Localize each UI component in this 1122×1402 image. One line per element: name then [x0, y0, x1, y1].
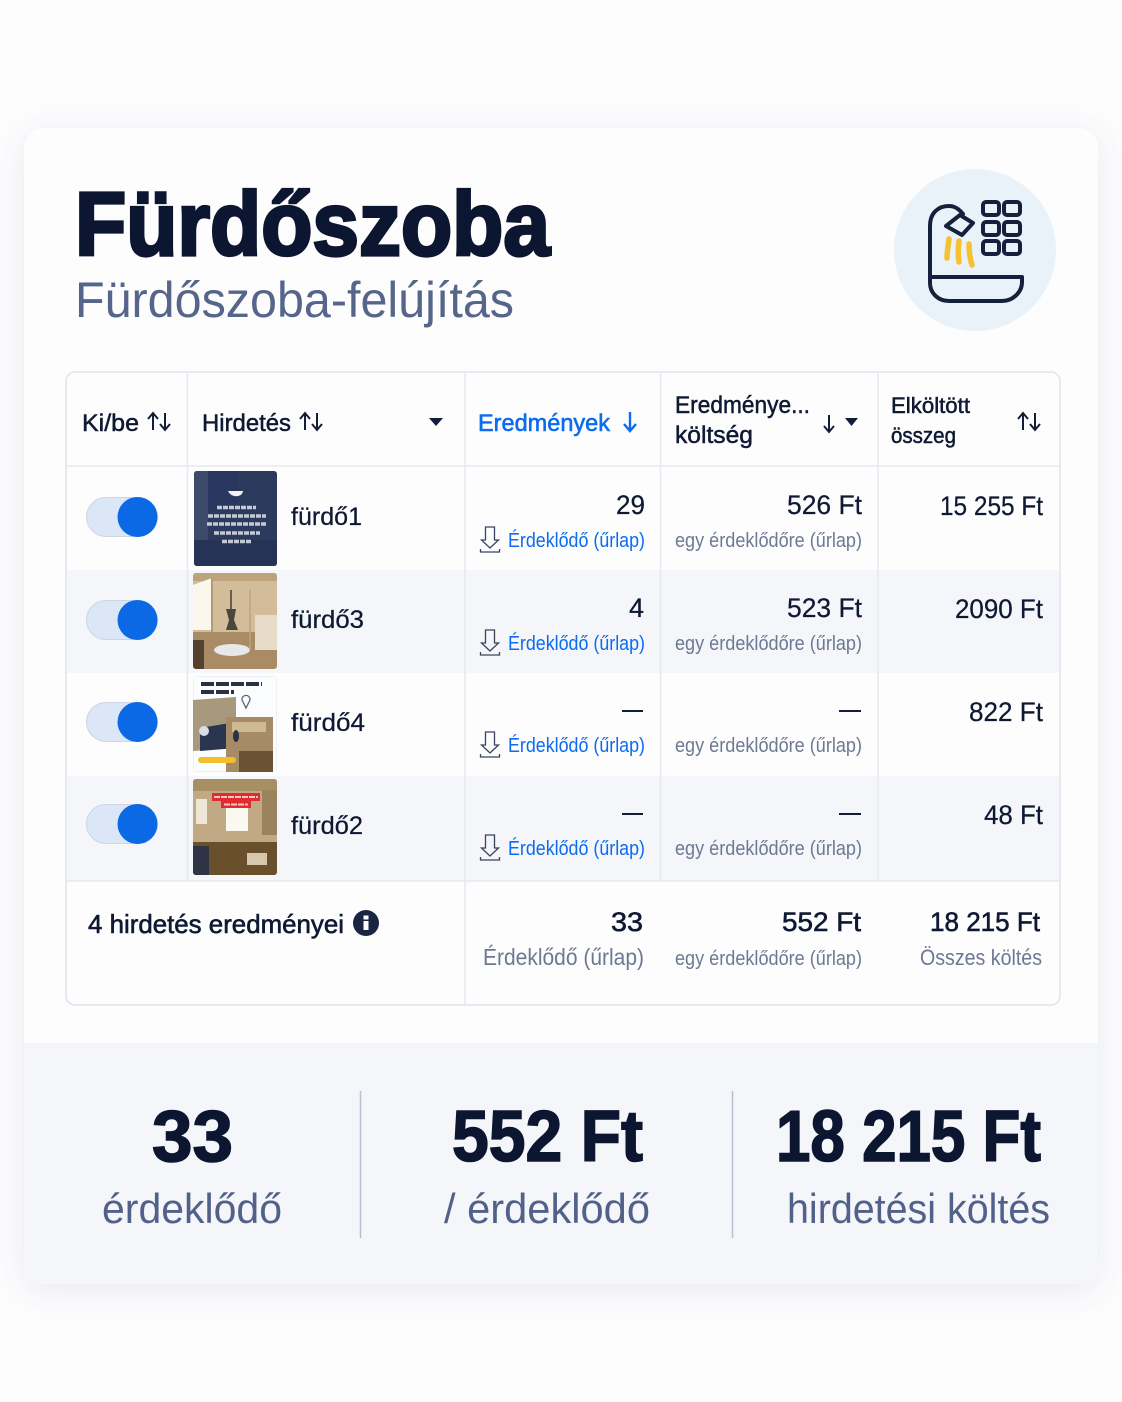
header: Eredmények: Eredmények: [478, 410, 611, 437]
results: [480, 710, 645, 757]
results: [480, 490, 645, 552]
metric: leads: [102, 1097, 282, 1232]
toggle: [86, 702, 158, 742]
header: Elköltött összeg: [891, 393, 1040, 448]
summary cost: egy érdeklődőre (űrlap): [675, 948, 862, 970]
spend: 2090 Ft: [955, 594, 1043, 624]
cost per result: egy érdeklődőre (űrlap): [675, 530, 862, 552]
cost per result: egy érdeklődőre (űrlap): [675, 633, 862, 655]
summary spend: Összes költés: [920, 945, 1042, 970]
header: Hirdetés: Hirdetés: [202, 410, 291, 437]
table header row: [82, 392, 1040, 449]
results: Érdeklődő (űrlap): [508, 632, 645, 655]
title: Fürdőszoba: [75, 175, 551, 275]
header: Eredményeinek költsége: [675, 392, 858, 449]
summary results: Érdeklődő (űrlap): [483, 944, 644, 970]
metric: cost per lead: [444, 1097, 650, 1232]
metric: cost per lead: 552 Ft: [452, 1097, 643, 1177]
header: Elköltött összeg: összeg: [891, 423, 956, 448]
cost per result: 523 Ft: [787, 593, 862, 623]
header: Hirdetés: [202, 410, 443, 437]
row: fürdő1: [86, 471, 1043, 566]
header: Ki/be: [82, 410, 170, 437]
metric: ad spend: 18 215 Ft: [776, 1097, 1041, 1177]
header: Eredményeinek költsége: költség: [675, 422, 753, 449]
ad name: fürdő4: [291, 709, 365, 737]
toggle: [86, 804, 158, 844]
results: [480, 593, 645, 655]
panel: data table: [66, 372, 1060, 1005]
ad name: fürdő3: [291, 606, 364, 634]
results: Érdeklődő (űrlap): [508, 529, 645, 552]
row: fürdő2: [86, 779, 1043, 875]
thumbnail: collage poster: [193, 676, 277, 772]
results: 29: [616, 490, 645, 520]
panel: key metrics: [102, 1091, 1050, 1238]
results: Érdeklődő (űrlap): [508, 734, 645, 757]
results: [480, 813, 645, 860]
metric: ad spend: hirdetési költés: [787, 1185, 1050, 1232]
metric: leads: érdeklődő: [102, 1185, 282, 1232]
summary results: 33: [611, 907, 643, 937]
row: fürdő4: [86, 676, 1043, 772]
cost per result: egy érdeklődőre (űrlap): [675, 735, 862, 757]
summary cost: 552 Ft: [782, 907, 862, 937]
summary cost: [675, 907, 862, 970]
summary label: 4 hirdetés eredményei: [88, 909, 344, 939]
metric: leads: 33: [152, 1097, 233, 1177]
cost per result: [675, 593, 862, 655]
metric: cost per lead: / érdeklődő: [444, 1185, 650, 1232]
subtitle: Fürdőszoba-felújítás: [75, 272, 514, 328]
summary spend: [920, 907, 1042, 970]
thumbnail: bathroom with red label: [193, 779, 277, 875]
table summary row: [88, 907, 1042, 970]
metric: ad spend: [776, 1097, 1050, 1232]
header: Eredményeinek költsége: Eredménye...: [675, 392, 810, 419]
icon: info: [353, 910, 379, 936]
thumbnail: bathroom with tub: [193, 573, 277, 669]
ad name: fürdő1: [291, 503, 362, 531]
spend: 822 Ft: [969, 697, 1043, 727]
toggle: [86, 600, 158, 640]
ad name: fürdő2: [291, 812, 363, 840]
toggle: [86, 497, 158, 537]
header: Elköltött összeg: Elköltött: [891, 393, 970, 418]
summary spend: 18 215 Ft: [930, 907, 1040, 937]
spend: 15 255 Ft: [940, 491, 1043, 521]
results: 4: [629, 593, 644, 623]
results: Érdeklődő (űrlap): [508, 837, 645, 860]
panel: main card: [24, 128, 1098, 1284]
header: Ki/be: Ki/be: [82, 410, 139, 437]
cost per result: 526 Ft: [787, 490, 862, 520]
cost per result: [675, 490, 862, 552]
icon: bathtub, shower and tiles: [894, 169, 1056, 331]
cost per result: egy érdeklődőre (űrlap): [675, 838, 862, 860]
spend: 48 Ft: [984, 800, 1043, 830]
thumbnail: dark poster: [194, 471, 277, 566]
row: fürdő3: [86, 573, 1043, 669]
summary results: [483, 907, 644, 970]
